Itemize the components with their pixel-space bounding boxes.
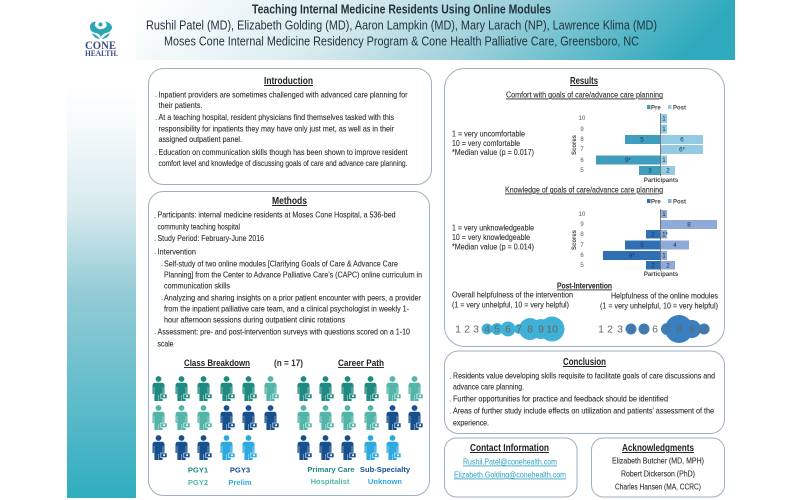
- conclusion text: Further opportunities for practice and feedback should be identified: [453, 394, 668, 404]
- methods text: Self-study of two online modules [Clarifying Goals of Care & Advance Care: [164, 258, 398, 268]
- legend: Pre: [651, 200, 661, 206]
- methods text: Participants: internal medicine residents at Moses Cone Hospital, a 536-bed: [158, 210, 396, 220]
- chart: knowledge: Scores: [572, 229, 578, 250]
- chart: comfort: 2: [666, 168, 670, 174]
- chart: knowledge: 5: [580, 263, 584, 269]
- modules helpfulness caption: (1 = very unhelpful, 10 = very helpful): [600, 300, 718, 310]
- methods text: [154, 210, 422, 348]
- methods text: .: [154, 211, 156, 220]
- authors: Rushil Patel (MD), Elizabeth Golding (MD), Aaron Lampkin (MD), Mary Larach (NP), Lawrence Klima (MD): [146, 18, 657, 32]
- bubble scale: overall helpfulness: 4: [484, 324, 490, 336]
- chart: comfort: 5: [580, 168, 584, 174]
- introduction text: Education on communication skills though has been shown to improve resident: [158, 147, 408, 157]
- bubble scale: overall helpfulness: 10: [546, 324, 558, 336]
- chart: comfort: Scores: [572, 134, 578, 155]
- comfort scale key: *Median value (p = 0.017): [452, 147, 534, 157]
- knowledge scale key: *Median value (p = 0.014): [452, 242, 534, 252]
- introduction text: At a teaching hospital, resident physicians find themselves tasked with this: [158, 112, 394, 122]
- conclusion text: Areas of further study include effects on utilization and patients’ assessment of the: [453, 406, 714, 416]
- legend: class breakdown: PGY2: [188, 478, 208, 487]
- bubble scale: modules helpfulness: 8: [676, 324, 682, 336]
- pictogram: class breakdown: [152, 376, 279, 460]
- methods text: .: [161, 259, 163, 268]
- introduction text: assigned outpatient panel.: [158, 134, 242, 144]
- chart: comfort: 8: [580, 137, 584, 143]
- names: [612, 456, 704, 492]
- subheading: knowledge: Knowledge of goals of care/advance care planning: [505, 184, 663, 194]
- legend: Post: [673, 106, 686, 112]
- heading: conclusion: Conclusion: [563, 357, 606, 368]
- chart: knowledge: 2: [666, 262, 670, 270]
- methods text: Intervention: [158, 246, 196, 256]
- bubble scale: modules helpfulness: 6: [652, 324, 658, 336]
- comfort scale key: [452, 128, 534, 157]
- legend: career path: Hospitalist: [311, 477, 350, 486]
- panel: conclusion: [444, 351, 724, 434]
- panel: acknowledgments: [592, 438, 724, 497]
- icon: Cone Health logo: CONE: [85, 40, 116, 52]
- bubble scale: modules helpfulness: [598, 315, 710, 343]
- overall helpfulness caption: [452, 290, 573, 310]
- chart: knowledge: 8*: [629, 252, 636, 260]
- legend: [647, 105, 686, 112]
- introduction text: responsibility for inpatients they may have only just met, as well as in their: [158, 124, 394, 134]
- icon: Cone Health logo: [85, 22, 118, 58]
- introduction text: .: [155, 148, 157, 157]
- chart: knowledge: 8: [580, 232, 584, 238]
- knowledge scale key: 1 = very unknowledgeable: [452, 222, 534, 232]
- subheading: post-intervention: Post-Intervention: [557, 280, 612, 290]
- bubble scale: modules helpfulness: 5: [641, 324, 647, 336]
- heading: introduction: Introduction: [264, 76, 313, 87]
- email addresses: [454, 458, 566, 480]
- legend: Pre: [651, 106, 661, 112]
- chart: knowledge: [572, 199, 717, 278]
- chart: comfort: 5: [640, 136, 644, 144]
- introduction text: Inpatient providers are sometimes challenged with advanced care planning for: [158, 90, 408, 100]
- conclusion text: .: [449, 406, 451, 416]
- chart: knowledge: 8: [687, 222, 691, 228]
- chart: knowledge: 2: [651, 232, 655, 238]
- chart: knowledge: 9: [580, 222, 584, 228]
- chart: comfort: 9*: [625, 157, 632, 164]
- panel: contact information: [444, 438, 577, 497]
- chart: comfort: 9: [580, 127, 584, 133]
- conclusion text: advance care planning.: [453, 382, 524, 392]
- chart: knowledge: 4: [673, 242, 677, 249]
- introduction text: comfort level and knowledge of discussing goals of care and advance care planning.: [158, 158, 408, 168]
- subheading: comfort: Comfort with goals of care/advance care planning: [506, 90, 663, 100]
- names: Robert Dickerson (PhD): [621, 468, 695, 478]
- conclusion text: .: [449, 372, 451, 381]
- bubble scale: overall helpfulness: [455, 316, 564, 342]
- knowledge scale key: [452, 222, 534, 252]
- comfort scale key: 10 = very comfortable: [452, 138, 520, 148]
- methods text: .: [154, 234, 156, 243]
- heading: contact: Contact Information: [470, 443, 549, 454]
- methods text: hour afternoon sessions during outpatient clinic rotations: [164, 314, 345, 324]
- methods text: Study Period: February-June 2016: [158, 233, 264, 243]
- bubble scale: overall helpfulness: 7: [516, 324, 522, 336]
- chart: knowledge: 2: [651, 262, 655, 270]
- overall helpfulness caption: Overall helpfulness of the intervention: [452, 290, 573, 300]
- modules helpfulness caption: Helpfulness of the online modules: [611, 290, 718, 300]
- bubble scale: overall helpfulness: 8: [527, 324, 533, 336]
- bubble scale: overall helpfulness: 1: [455, 324, 461, 336]
- introduction text: .: [155, 113, 157, 122]
- introduction text: [155, 90, 408, 168]
- chart: comfort: 10: [579, 116, 586, 122]
- panel: methods: [148, 192, 430, 496]
- chart: knowledge: 1*: [662, 232, 669, 238]
- panel: results: [444, 68, 724, 346]
- comfort scale key: 1 = very uncomfortable: [452, 128, 525, 138]
- legend: Post: [673, 200, 686, 206]
- email addresses: Rushil.Patel@conehealth.com: [463, 458, 557, 466]
- knowledge scale key: 10 = very knowledgeable: [452, 232, 530, 242]
- heading: methods: Methods: [272, 196, 307, 207]
- bubble scale: modules helpfulness: 7: [664, 324, 670, 336]
- chart: knowledge: 6: [580, 253, 584, 259]
- legend: career path: [307, 465, 411, 486]
- conclusion text: Residents value developing skills requisite to facilitate goals of care discussions and: [453, 370, 715, 380]
- chart: comfort: 6*: [679, 146, 686, 154]
- chart: comfort: [572, 105, 703, 184]
- bubble scale: overall helpfulness: 3: [473, 324, 479, 336]
- bubble scale: modules helpfulness: 4: [628, 324, 634, 336]
- names: Charles Hansen (MA, CCRC): [615, 482, 701, 492]
- bubble scale: overall helpfulness: 5: [494, 324, 500, 336]
- email addresses: Elizabeth.Golding@conehealth.com: [454, 470, 566, 480]
- introduction text: their patients.: [158, 100, 202, 110]
- methods text: Analyzing and sharing insights on a prior patient encounter with peers, a provider: [164, 292, 421, 302]
- heading: class breakdown: Class Breakdown: [184, 358, 250, 368]
- methods text: Planning] from the Center to Advance Palliative Care’s (CAPC) online curriculum in: [164, 270, 422, 280]
- chart: knowledge: Participants: [644, 272, 679, 278]
- heading: career path: Career Path: [338, 358, 384, 368]
- conclusion text: [449, 370, 715, 428]
- legend: class breakdown: PGY3: [230, 466, 250, 474]
- chart: comfort: 1: [662, 116, 666, 122]
- conclusion text: experience.: [453, 418, 489, 428]
- title: Teaching Internal Medicine Residents Using Online Modules: [252, 2, 551, 16]
- bubble scale: modules helpfulness: 3: [617, 324, 623, 336]
- bubble scale: overall helpfulness: 2: [464, 324, 470, 336]
- legend: [647, 199, 686, 206]
- chart: knowledge: 5: [640, 242, 644, 249]
- legend: career path: Sub-Specialty: [360, 465, 411, 474]
- chart: knowledge: 10: [579, 212, 586, 218]
- bubble scale: modules helpfulness: 10: [698, 324, 710, 336]
- bubble scale: overall helpfulness: 6: [505, 324, 511, 336]
- chart: comfort: 1: [662, 157, 666, 164]
- legend: career path: Unknown: [368, 477, 402, 486]
- chart: comfort: Participants: [644, 178, 679, 184]
- overall helpfulness caption: (1 = very unhelpful, 10 = very helpful): [452, 300, 569, 310]
- chart: comfort: 7: [580, 147, 584, 153]
- heading: results: Results: [570, 76, 598, 87]
- chart: comfort: 1: [662, 126, 666, 133]
- methods text: Assessment: pre- and post-intervention surveys with questions scored on a 1-10: [158, 326, 410, 336]
- bubble scale: modules helpfulness: 1: [598, 324, 604, 336]
- modules helpfulness caption: [600, 290, 718, 310]
- sidebar background: [67, 83, 136, 498]
- panel: introduction: [148, 68, 432, 184]
- header banner: [136, 0, 735, 60]
- chart: knowledge: 1: [662, 211, 666, 218]
- introduction text: .: [155, 90, 157, 99]
- heading: acknowledgments: Acknowledgments: [622, 443, 694, 454]
- chart: comfort: 3: [648, 168, 652, 174]
- affiliation: Moses Cone Internal Medicine Residency Program & Cone Health Palliative Care, Greensboro, NC: [164, 34, 639, 48]
- methods text: communication skills: [164, 280, 230, 290]
- names: Elizabeth Butcher (MD, MPH): [612, 456, 704, 466]
- bubble scale: overall helpfulness: 9: [538, 324, 544, 336]
- methods text: scale: [158, 338, 174, 348]
- chart: knowledge: 1: [662, 252, 666, 260]
- chart: comfort: 6: [580, 158, 584, 164]
- sample size: (n = 17): [274, 358, 303, 368]
- chart: knowledge: 7: [580, 243, 584, 249]
- methods text: from the inpatient palliative care team, and a clinical psychologist in weekly 1-: [164, 304, 409, 314]
- legend: class breakdown: PGY1: [188, 466, 209, 474]
- bubble scale: modules helpfulness: 9: [689, 324, 695, 336]
- methods text: .: [161, 293, 163, 302]
- methods text: community teaching hospital: [158, 222, 240, 232]
- legend: class breakdown: [188, 466, 252, 487]
- methods text: .: [154, 247, 156, 256]
- bubble scale: modules helpfulness: 2: [607, 324, 613, 336]
- conclusion text: .: [449, 394, 451, 404]
- legend: class breakdown: Prelim: [228, 478, 252, 487]
- methods text: .: [154, 327, 156, 336]
- chart: comfort: 6: [680, 136, 684, 144]
- icon: Cone Health logo: HEALTH.: [85, 49, 118, 58]
- legend: career path: Primary Care: [307, 465, 355, 474]
- pictogram: career path: [298, 376, 423, 460]
